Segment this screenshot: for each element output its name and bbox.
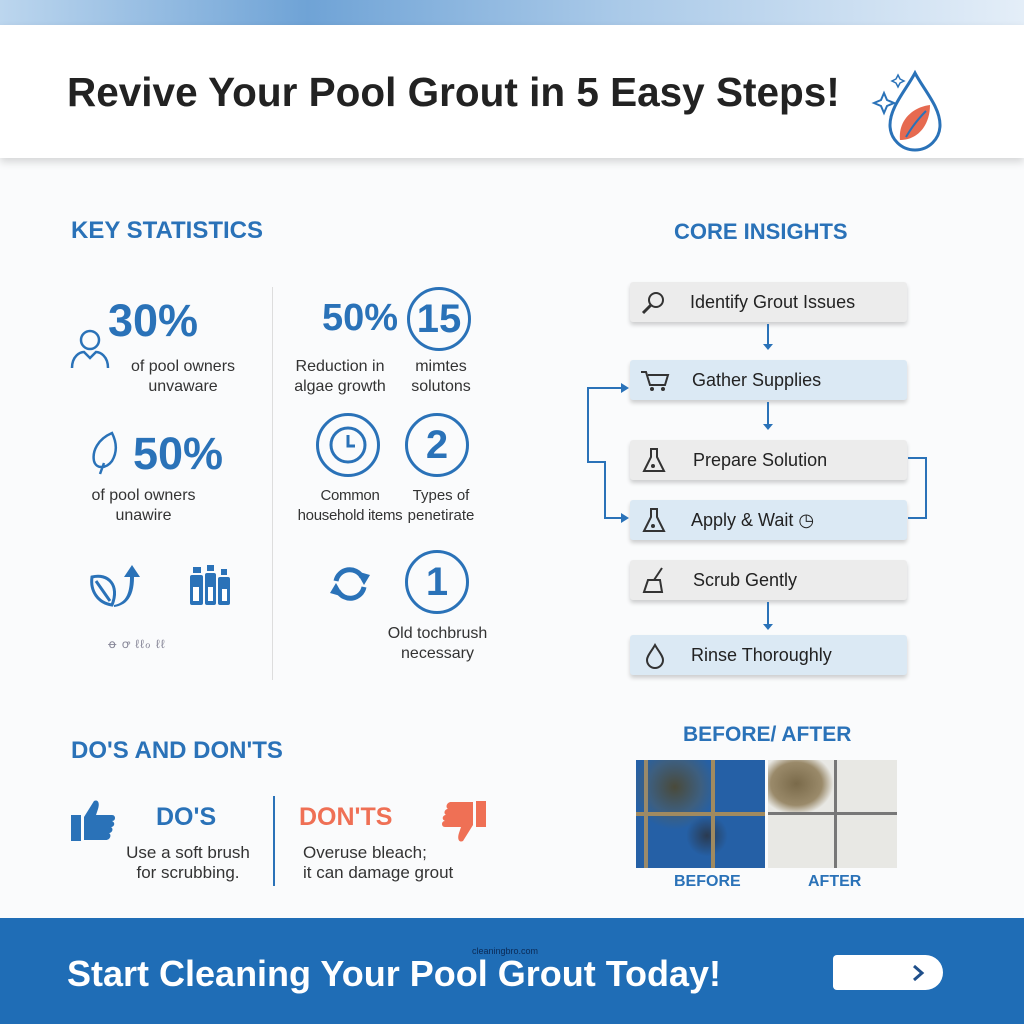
stat: 15 minutes: 15 (417, 297, 461, 341)
stat: 15 minutes: mimtes (415, 358, 467, 375)
top strip (0, 0, 1024, 25)
stat: clock common items: household items (298, 507, 402, 524)
title: Revive Your Pool Grout in 5 Easy Steps! (67, 69, 840, 115)
step 3 (630, 440, 907, 480)
don'ts: DON'TS (299, 803, 392, 831)
don'ts: Overuse bleach; (303, 843, 427, 862)
heading: dos and donts: DO'S AND DON'TS (71, 737, 283, 764)
loop connectors (587, 383, 927, 523)
step 6 (630, 635, 907, 675)
icon: drop with leaf (872, 70, 942, 152)
step 5: Scrub Gently (693, 570, 797, 590)
step 4 (630, 500, 907, 540)
don'ts (299, 801, 486, 882)
do's (71, 800, 250, 882)
stat: 1 toothbrush: necessary (401, 645, 474, 662)
stat: 1 toothbrush: 1 (426, 560, 448, 604)
step 3: Prepare Solution (693, 450, 827, 470)
stat: 30%: 30% (108, 295, 198, 346)
step 1: Identify Grout Issues (690, 292, 855, 312)
stat: 30% (70, 295, 235, 395)
stat: 2 types (405, 413, 474, 524)
button (833, 955, 943, 990)
footer text: Start Cleaning Your Pool Grout Today! (67, 953, 721, 994)
step 4: Apply & Wait ◷ (691, 510, 814, 530)
stat: 50% reduction (294, 297, 398, 395)
before/after photos (636, 760, 897, 890)
don'ts: it can damage grout (303, 863, 453, 882)
stat: 50% reduction: Reduction in (296, 358, 384, 375)
step 2 (630, 360, 907, 400)
stat: 15 minutes (407, 287, 471, 395)
flowchart (587, 282, 927, 680)
stat: 50% owners: 50% (133, 428, 223, 479)
stat: 15 minutes: solutons (411, 378, 471, 395)
before/after photos: AFTER (808, 873, 861, 890)
stat: 50% owners: unawire (115, 507, 172, 524)
do's: for scrubbing. (136, 863, 240, 882)
stat: clock common items: Common (320, 487, 380, 504)
stat: 50% owners (91, 428, 223, 524)
do's: DO'S (156, 803, 216, 831)
stat: 50% reduction: 50% (322, 297, 398, 339)
heading: core insights: CORE INSIGHTS (674, 219, 848, 244)
step 5 (630, 560, 907, 600)
step 1 (630, 282, 907, 322)
footer banner: cleaningbro.com (472, 946, 538, 956)
stat: 2 types: penetirate (408, 507, 474, 524)
heading: before after: BEFORE/ AFTER (683, 723, 851, 746)
stat: 50% owners: of pool owners (91, 487, 196, 504)
icons: leaf arrow and bottles: ꝋ ꝍ ℓℓℴ ℓℓ (108, 637, 166, 651)
before/after photos: BEFORE (674, 873, 741, 890)
divider (273, 796, 275, 886)
footer banner (0, 918, 1024, 1024)
stat: 2 types: Types of (413, 487, 469, 504)
stat: 50% reduction: algae growth (294, 378, 386, 395)
heading: key statistics: KEY STATISTICS (71, 217, 263, 244)
icon: refresh (330, 567, 370, 601)
stat: clock common items (298, 413, 402, 524)
divider (272, 287, 273, 680)
stat: 30%: unvaware (148, 378, 218, 395)
step 2: Gather Supplies (692, 370, 821, 390)
header band (0, 25, 1024, 158)
stat: 1 toothbrush: Old tochbrush (388, 625, 487, 642)
do's: Use a soft brush (126, 843, 250, 862)
stat: 2 types: 2 (426, 423, 448, 467)
step 6: Rinse Thoroughly (691, 645, 832, 665)
icons: leaf arrow and bottles (90, 565, 230, 651)
stat: 1 toothbrush (388, 550, 487, 662)
stat: 30%: of pool owners (131, 358, 235, 375)
